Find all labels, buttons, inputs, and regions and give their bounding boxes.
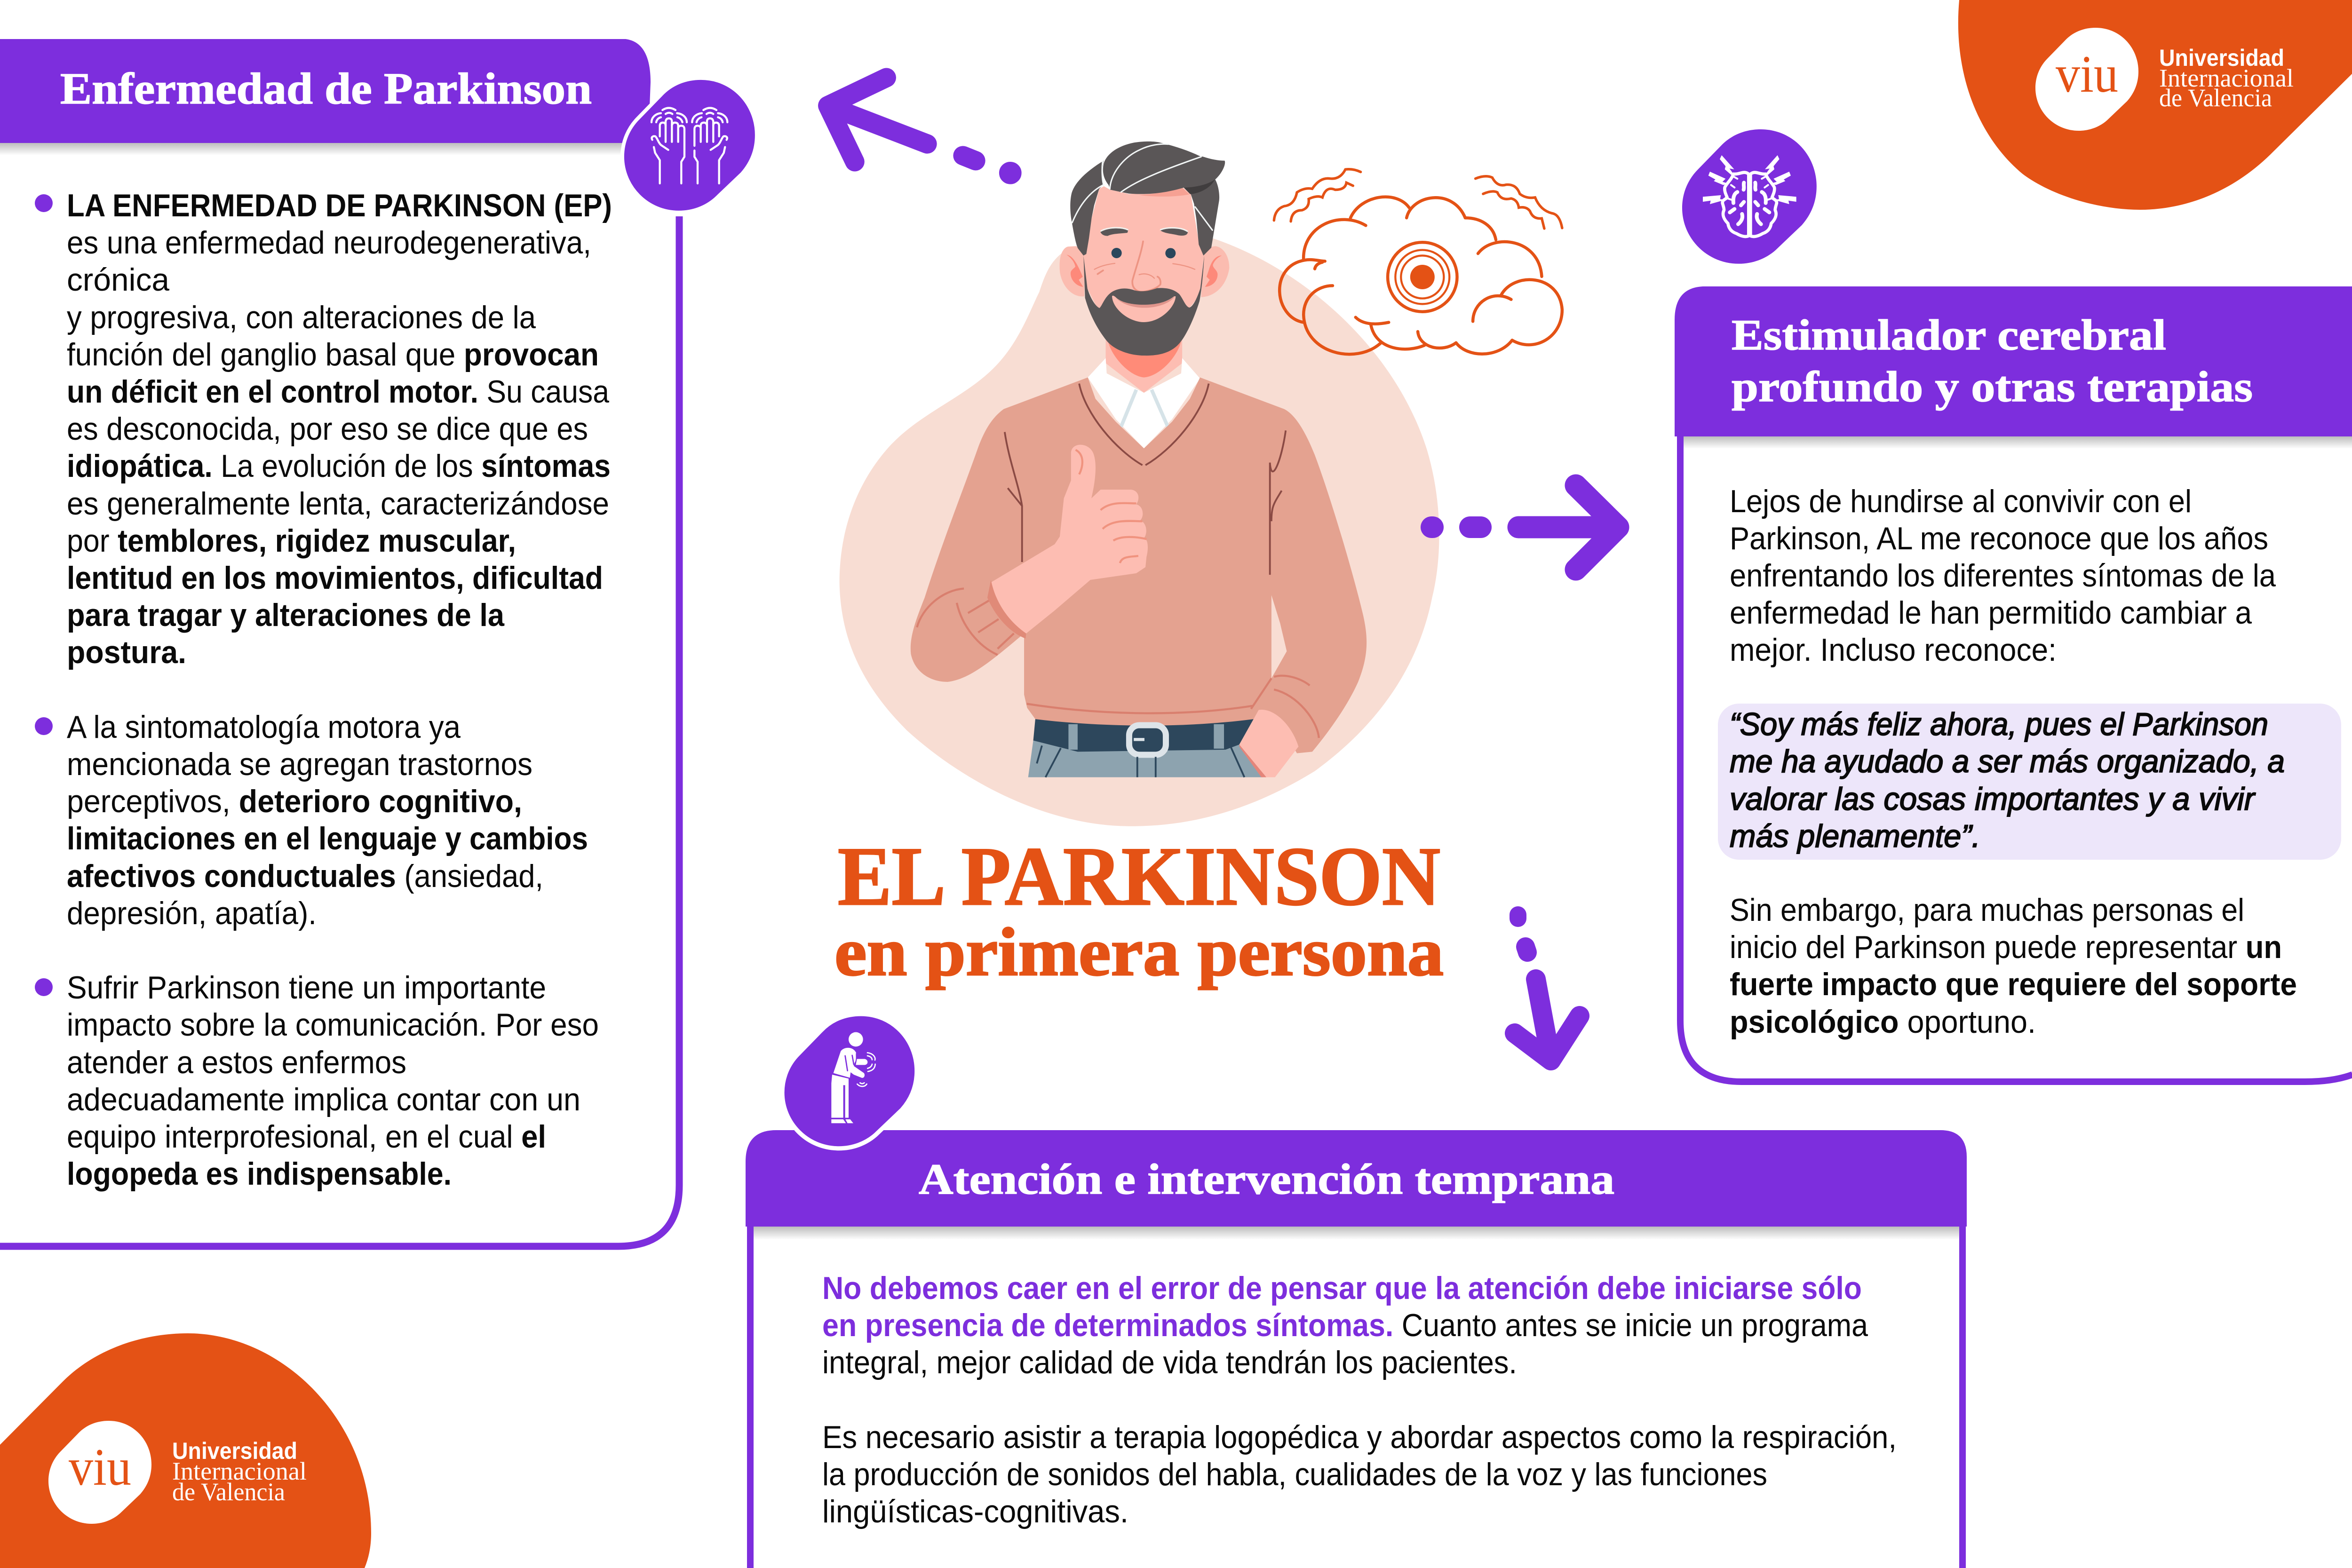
text block: left panel: lentitud en los movimientos, dificultad: [67, 560, 603, 596]
text block: left panel: depresión, apatía).: [67, 895, 317, 931]
text block: bottom panel: lingüísticas-cognitivas.: [822, 1494, 1128, 1529]
text block: left panel: impacto sobre la comunicación. Por eso: [67, 1007, 599, 1043]
text block: right panel: valorar las cosas importantes y a vivir: [1730, 781, 2256, 817]
text block: bottom panel: en presencia de determinados síntomas. Cuanto antes se inicie un programa: [822, 1307, 1868, 1343]
text block: bottom panel: la producción de sonidos del habla, cualidades de la voz y las funciones: [822, 1457, 1767, 1492]
thought cloud with target: [1274, 169, 1562, 354]
panel: Enfermedad de Parkinson: [0, 39, 757, 1246]
text block: bottom panel: [822, 1270, 1897, 1529]
title: El Parkinson en primera persona: [834, 830, 1444, 990]
logo: top right: viu: [2056, 45, 2118, 103]
panel heading: Enfermedad de Parkinson: [0, 39, 651, 143]
logo: top right: de Valencia: [2159, 84, 2272, 112]
text block: right panel: mejor. Incluso reconoce:: [1730, 632, 2057, 668]
text block: left panel: Sufrir Parkinson tiene un importante: [67, 970, 546, 1006]
text block: left panel: adecuadamente implica contar con un: [67, 1082, 580, 1117]
panel heading: Atención e intervención temprana: Atención e intervención temprana: [919, 1155, 1614, 1203]
text block: right panel: enfermedad le han permitido cambiar a: [1730, 595, 2252, 631]
text block: right panel: inicio del Parkinson puede representar un: [1730, 929, 2282, 965]
text block: bottom panel: No debemos caer en el error de pensar que la atención debe iniciarse sólo: [822, 1270, 1862, 1306]
arrow: to right panel: [1431, 485, 1618, 570]
text block: left panel: perceptivos, deterioro cognitivo,: [67, 784, 522, 819]
illustration: man with thumb up and cloud: [828, 78, 1562, 826]
text block: left panel: limitaciones en el lenguaje y cambios: [67, 821, 588, 856]
panel: Atención e intervención temprana: [746, 1014, 1967, 1568]
text block: left panel: función del ganglio basal que provocan: [67, 337, 599, 372]
panel heading: Estimulador cerebral: Estimulador cerebral: [1732, 311, 2166, 359]
icon: trembling hands: [622, 78, 757, 213]
text block: left panel: postura.: [67, 634, 186, 670]
text block: bottom panel: integral, mejor calidad de vida tendrán los pacientes.: [822, 1345, 1517, 1380]
text block: left panel: es desconocida, por eso se dice que es: [67, 411, 588, 447]
text block: left panel: [67, 188, 612, 1192]
text block: left panel: atender a estos enfermos: [67, 1045, 406, 1080]
text block: left panel: crónica: [67, 262, 169, 298]
panel heading: Estimulador cerebral: [1675, 286, 2352, 436]
man head: [1059, 142, 1229, 356]
text block: left panel: es una enfermedad neurodegenerativa,: [67, 225, 591, 261]
arrow: to bottom panel: [1515, 915, 1580, 1061]
title: El Parkinson en primera persona: en primera persona: [834, 914, 1444, 990]
panel heading: Enfermedad de Parkinson: Enfermedad de Parkinson: [60, 64, 592, 113]
arrow: to left panel: [828, 78, 1016, 179]
text block: left panel: y progresiva, con alteraciones de la: [67, 300, 536, 335]
bullet: [35, 978, 53, 996]
logo: bottom left: de Valencia: [172, 1478, 285, 1506]
title: El Parkinson en primera persona: EL PARKINSON: [838, 830, 1440, 923]
text block: right panel: Sin embargo, para muchas personas el: [1730, 892, 2244, 928]
text block: left panel: equipo interprofesional, en el cual el: [67, 1119, 546, 1155]
icon: person with tremor: [782, 1014, 917, 1148]
text block: left panel: idiopática. La evolución de los síntomas: [67, 448, 611, 484]
logo: top right: Internacional: [2159, 64, 2294, 92]
text block: left panel: un déficit en el control motor. Su causa: [67, 374, 609, 410]
text block: right panel: “Soy más feliz ahora, pues el Parkinson: [1730, 706, 2268, 742]
logo: top right: Universidad: [2159, 45, 2284, 71]
panel heading: Estimulador cerebral: profundo y otras terapias: [1732, 363, 2253, 411]
bullet: [35, 194, 53, 212]
text block: bottom panel: Es necesario asistir a terapia logopédica y abordar aspectos como la respiración,: [822, 1419, 1897, 1455]
text block: left panel: logopeda es indispensable.: [67, 1156, 452, 1192]
bullet: [35, 717, 53, 735]
text block: left panel: mencionada se agregan trastornos: [67, 746, 532, 782]
logo: bottom left: Universidad: [172, 1438, 297, 1464]
text block: left panel: es generalmente lenta, caracterizándose: [67, 486, 609, 522]
man figure: [911, 338, 1367, 777]
logo: bottom left: Internacional: [172, 1457, 307, 1485]
text block: right panel: [1730, 483, 2297, 1040]
text block: right panel: Parkinson, AL me reconoce que los años: [1730, 521, 2268, 556]
quote box: [1718, 704, 2341, 860]
text block: right panel: más plenamente”.: [1730, 818, 1980, 854]
text block: left panel: LA ENFERMEDAD DE PARKINSON (EP): [67, 188, 612, 223]
panel heading: Atención e intervención temprana: [746, 1130, 1967, 1227]
text block: left panel: para tragar y alteraciones de la: [67, 597, 505, 633]
logo: bottom left: [0, 1333, 371, 1568]
text block: right panel: me ha ayudado a ser más organizado, a: [1730, 744, 2285, 779]
text block: left panel: A la sintomatología motora ya: [67, 709, 461, 745]
logo: top right: [1958, 0, 2352, 210]
icon: brain with sparks: [1682, 129, 1817, 264]
logo: bottom left: viu: [69, 1438, 131, 1497]
background blob: [840, 238, 1439, 826]
text block: right panel: fuerte impacto que requiere del soporte: [1730, 966, 2297, 1002]
panel: Estimulador cerebral profundo y otras terapias: [1675, 286, 2352, 1082]
text block: right panel: Lejos de hundirse al convivir con el: [1730, 483, 2192, 519]
text block: left panel: afectivos conductuales (ansiedad,: [67, 858, 543, 894]
text block: right panel: psicológico oportuno.: [1730, 1004, 2036, 1040]
text block: left panel: por temblores, rigidez muscular,: [67, 523, 516, 559]
text block: right panel: enfrentando los diferentes síntomas de la: [1730, 558, 2276, 594]
